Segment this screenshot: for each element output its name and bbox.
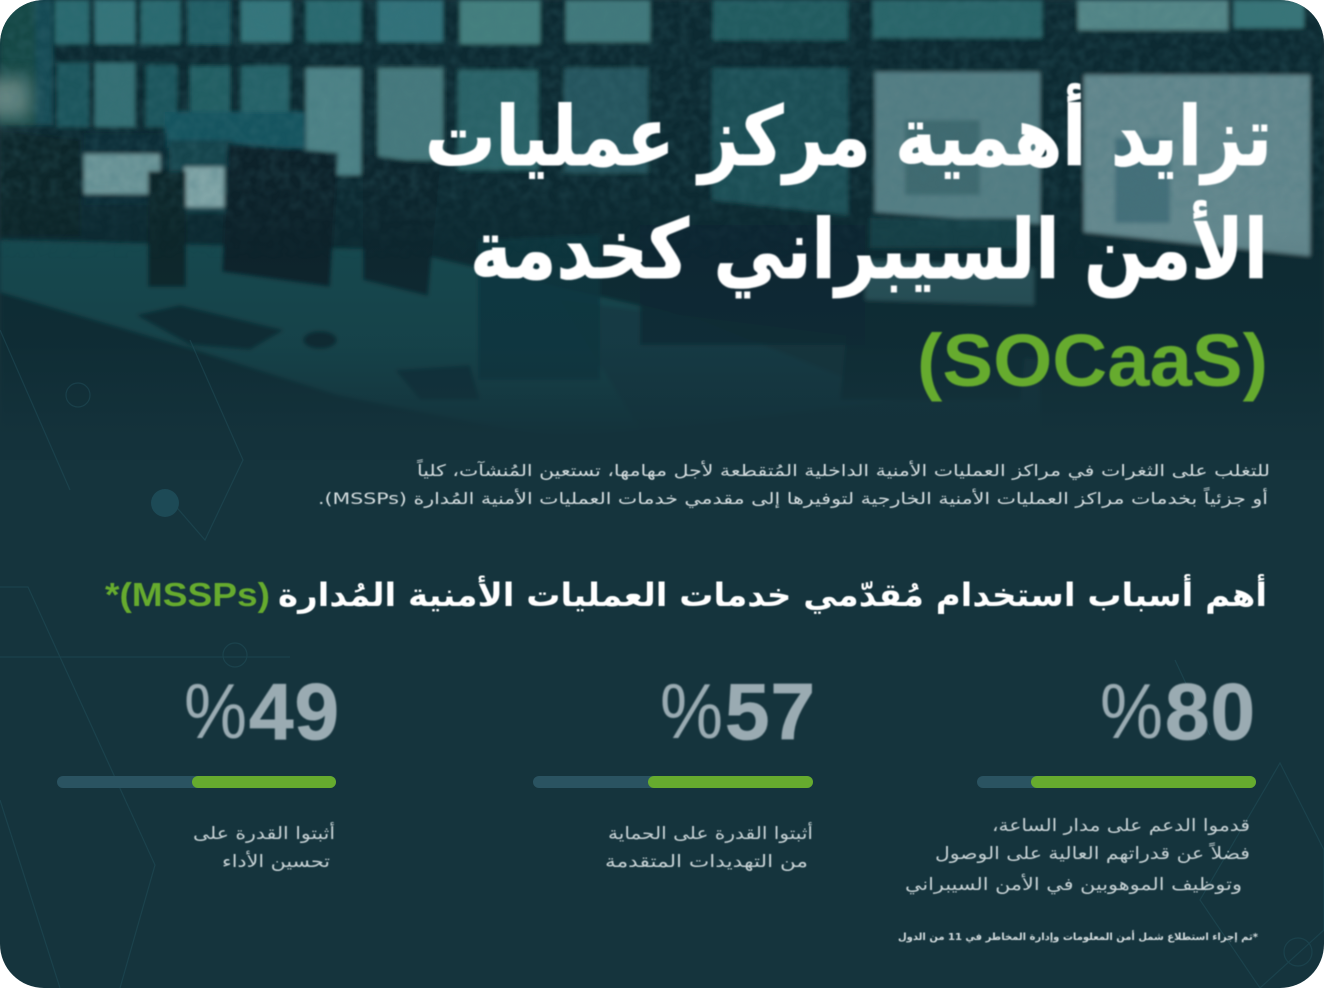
stat: 80 percent: وتوظيف الموهوبين في الأمن السيبراني [905,874,1242,895]
stat: 80 percent: قدموا الدعم على مدار الساعة، [992,816,1250,836]
stat: 49 percent: 49 [249,667,339,756]
stat: 57 percent [533,667,815,872]
stat: 80 percent [905,667,1256,895]
stat: 80 percent: % [1100,667,1163,755]
title: (SOCaaS) [917,319,1268,402]
photo texture [0,0,1324,217]
title [425,83,1272,402]
stat: 57 percent: أثبتوا القدرة على الحماية [608,822,813,844]
desk surface [0,238,642,402]
monitors [0,130,80,236]
stat: 80 percent: فضلاً عن قدراتهم العالية على الوصول [935,842,1250,864]
stat: 57 percent: من التهديدات المتقدمة [605,852,808,872]
stat: 57 percent: 57 [725,667,815,756]
section heading: أهم أسباب استخدام مُقدّمي خدمات العمليات الأمنية المُدارة [278,574,1267,614]
intro text: للتغلب على الثغرات في مراكز العمليات الأمنية الداخلية المُتقطعة لأجل مهامها، تستعين المُنشآت، كلياً [416,458,1270,481]
stat: 49 percent: تحسين الأداء [222,851,330,872]
section heading: *(MSSPs) [105,576,270,613]
stat: 49 percent: أثبتوا القدرة على [193,822,335,844]
intro text [318,458,1270,509]
decorative dot [151,489,179,517]
footnote: *تم إجراء استطلاع شمل أمن المعلومات وإدارة المخاطر في 11 من الدول [898,930,1259,943]
stat: 49 percent: % [184,667,247,755]
stat: 57 percent: % [660,667,723,755]
photo fade to background [2,352,1322,450]
light blob at top-left corner [0,78,30,118]
stat: 49 percent [57,667,339,872]
decorative network lines [0,330,1324,988]
photo: security operations centre [0,0,1324,386]
intro text: أو جزئياً بخدمات مراكز العمليات الأمنية الخارجية لتوفيرها إلى مقدمي خدمات العمليات الأمنية المُدارة (MSSPs). [318,486,1268,509]
stat: 80 percent: 80 [1165,667,1255,756]
